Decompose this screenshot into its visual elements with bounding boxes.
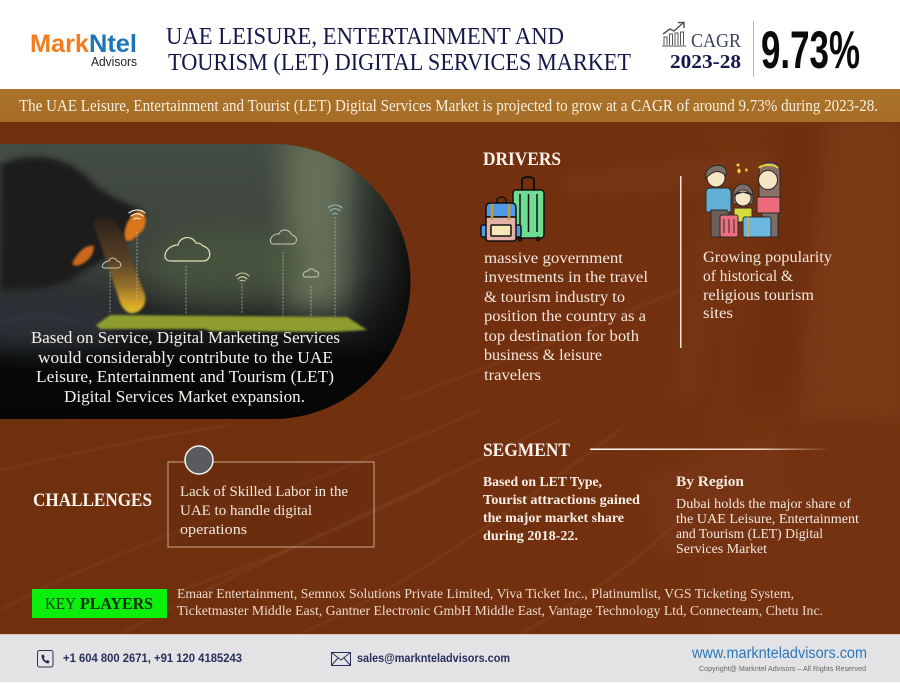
- logo: MarkNtel Advisors: [30, 30, 137, 69]
- driver text: investments: investments in the travel: [484, 269, 648, 286]
- panel: drivers: [481, 149, 832, 384]
- pill caption: Digital Services Market expansion.: [64, 387, 305, 406]
- icon: mail: [332, 652, 350, 666]
- driver text: tourism sites: sites: [703, 305, 733, 322]
- heading rule: [590, 448, 830, 450]
- driver text: investments: travelers: [484, 367, 541, 384]
- challenge box: [168, 462, 374, 547]
- CAGR label: 2023-28: [670, 51, 741, 73]
- panel: key players: [32, 587, 823, 619]
- driver text: investments: position the country as a: [484, 308, 646, 325]
- challenge text: Lack of Skilled Labor in the: [180, 484, 348, 500]
- title: [166, 24, 631, 76]
- challenge marker: [185, 446, 213, 474]
- key players badge: [32, 589, 167, 618]
- panel: brown textured background: [0, 122, 900, 634]
- icon: wifi yellow: [236, 273, 249, 281]
- icon: growth chart: [662, 22, 686, 46]
- segment text: LET type: the major market share: [483, 511, 624, 526]
- driver text: tourism sites: religious tourism: [703, 287, 814, 304]
- CAGR label: [670, 30, 742, 73]
- pill caption: [31, 328, 340, 406]
- segment text: by region: By Region: [676, 474, 745, 490]
- segment text: LET type: Based on LET Type,: [483, 475, 602, 490]
- driver text: investments: & tourism industry to: [484, 289, 625, 306]
- icon: phone: [38, 650, 53, 667]
- icon: small cloud: [303, 269, 319, 277]
- summary band: [0, 89, 900, 122]
- hand: pointing finger: [93, 218, 145, 313]
- title: TOURISM (LET) DIGITAL SERVICES MARKET: [168, 50, 631, 76]
- panel: service photo pill: [0, 135, 415, 419]
- challenges heading: CHALLENGES: [33, 490, 152, 511]
- driver text: investments: massive government: [484, 250, 624, 267]
- drivers heading: DRIVERS: [483, 149, 561, 170]
- email: sales@marknteladvisors.com: [357, 653, 510, 665]
- divider: [753, 21, 754, 77]
- panel: segment: [483, 440, 859, 556]
- challenge text: UAE to handle digital: [180, 503, 312, 519]
- segment text: LET type: [483, 475, 640, 544]
- segment heading: SEGMENT: [483, 440, 570, 461]
- title: UAE LEISURE, ENTERTAINMENT AND: [166, 24, 564, 50]
- icon: family with luggage: [706, 162, 780, 237]
- segment text: by region: [676, 474, 859, 556]
- driver text: investments: top destination for both: [484, 328, 639, 345]
- segment text: by region: the UAE Leisure, Entertainment: [676, 511, 859, 526]
- segment text: LET type: during 2018-22.: [483, 529, 578, 544]
- panel: challenges: [33, 446, 374, 547]
- divider: [680, 176, 682, 348]
- icon: luggage: [481, 177, 544, 241]
- segment text: by region: Dubai holds the major share of: [676, 496, 852, 511]
- photo: hand and tablet: [0, 144, 410, 373]
- tablet: [96, 315, 367, 332]
- website: www.marknteladvisors.com: [691, 645, 867, 662]
- challenge text: [180, 484, 348, 538]
- pill caption: would considerably contribute to the UAE: [38, 348, 333, 367]
- key players badge: KEY: [45, 594, 76, 613]
- driver text: investments: [484, 250, 648, 384]
- driver text: tourism sites: of historical &: [703, 268, 793, 285]
- pill caption: Leisure, Entertainment and Tourism (LET): [36, 367, 334, 386]
- pill caption: Based on Service, Digital Marketing Services: [31, 328, 340, 347]
- driver text: investments: business & leisure: [484, 347, 602, 364]
- icon: large cloud: [165, 238, 210, 261]
- driver text: tourism sites: Growing popularity: [703, 249, 832, 266]
- hand: glowing finger edges: [124, 211, 146, 241]
- phone numbers: +1 604 800 2671, +91 120 4185243: [63, 653, 242, 665]
- logo: MarkNtel Advisors: Ntel: [89, 30, 137, 58]
- logo: MarkNtel Advisors: Advisors: [91, 55, 137, 69]
- panel: header: [30, 21, 860, 80]
- driver text: tourism sites: [703, 249, 832, 322]
- icon: right cloud: [270, 230, 296, 244]
- logo: MarkNtel Advisors: Mark: [30, 30, 89, 58]
- segment text: by region: and Tourism (LET) Digital: [676, 526, 823, 541]
- icon: wifi teal: [328, 205, 342, 214]
- key players list: Emaar Entertainment, Semnox Solutions Private Limited, Viva Ticket Inc., Platinumlist, VGS Ticketing System,: [177, 587, 794, 602]
- copyright: Copyright@ Markntel Advisors – All Rights Reserved: [699, 664, 866, 673]
- segment text: by region: Services Market: [676, 541, 767, 556]
- challenge text: operations: [180, 522, 247, 538]
- CAGR label: CAGR: [691, 30, 742, 52]
- key players badge: PLAYERS: [80, 594, 153, 613]
- key players list: [177, 587, 823, 619]
- panel: footer: [0, 634, 900, 682]
- icon: left cloud: [102, 258, 121, 268]
- icon: wifi white: [129, 210, 145, 219]
- segment text: LET type: Tourist attractions gained: [483, 493, 640, 508]
- network icons: [102, 205, 342, 316]
- key players list: Ticketmaster Middle East, Gantner Electronic GmbH Middle East, Vantage Technology Ltd, Connecteam, Chetu Inc.: [177, 604, 823, 619]
